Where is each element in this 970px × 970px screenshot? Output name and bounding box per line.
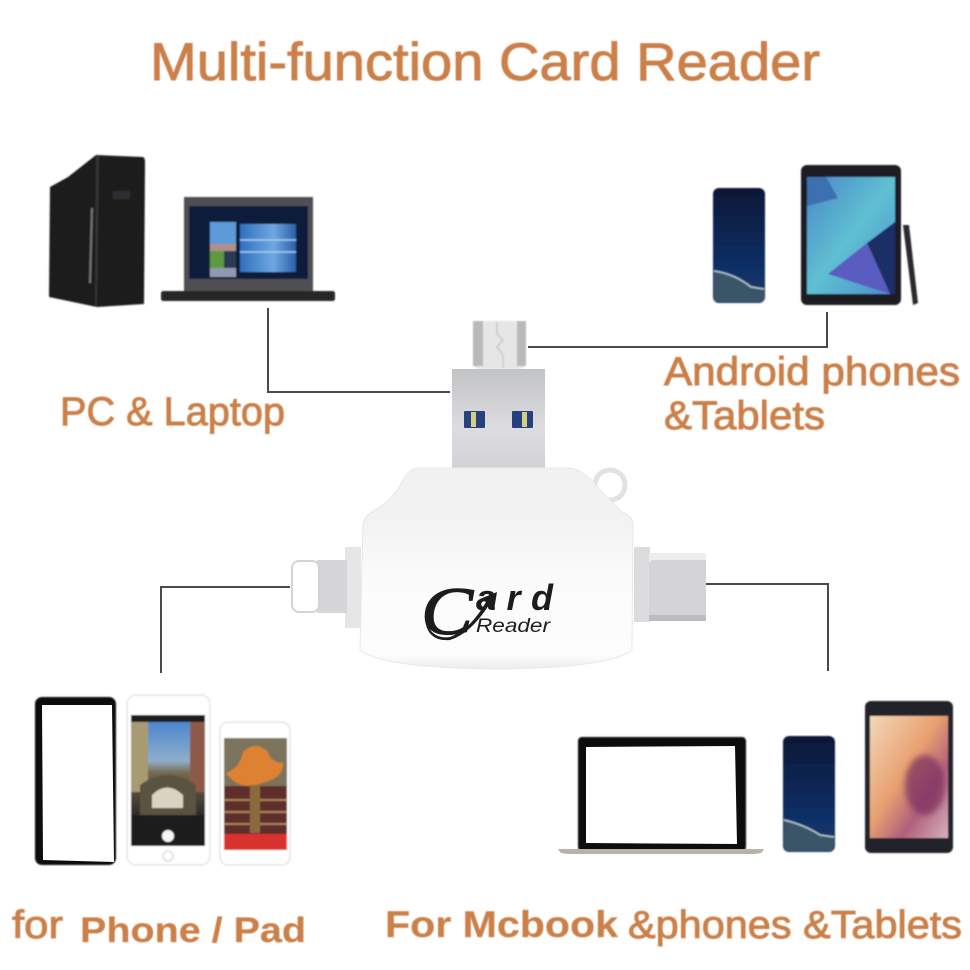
label: Android phones & Tablets: Android phones: [664, 350, 960, 394]
label: For Mcbook &phones &Tablets: [385, 904, 962, 947]
icon: iPhone with camera app: [127, 695, 210, 865]
label: for Phone / Pad: Phone / Pad: [80, 911, 306, 950]
label: Android phones & Tablets: &Tablets: [664, 394, 825, 438]
label: Android phones & Tablets: [664, 350, 960, 438]
connector: USB-A: [452, 369, 545, 468]
icon: MacBook with blank screen: [558, 737, 764, 854]
reader body: [360, 468, 633, 669]
logo: Card Reader: ard: [476, 577, 554, 618]
connector: USB-C: [706, 584, 828, 671]
icon: phone: [783, 736, 835, 852]
connector: micro USB: [473, 321, 526, 369]
icon: phone with blank screen: [35, 697, 116, 865]
label: For Mcbook &phones &Tablets: &phones &Tablets: [628, 904, 962, 947]
title: Multi-function Card Reader: [150, 33, 820, 92]
key ring: [595, 470, 625, 500]
icon: desktop tower: [49, 155, 145, 307]
logo: Card Reader: C: [421, 573, 474, 649]
icon: Android phone: [713, 188, 765, 303]
logo: Card Reader: [421, 573, 554, 649]
icon: tablet with warm screen: [865, 701, 953, 853]
icon: tablet with stylus: [801, 165, 918, 305]
label: for Phone / Pad: [12, 904, 306, 950]
icon: iPhone with hat photo: [220, 722, 290, 865]
label: PC & Laptop: PC & Laptop: [60, 390, 285, 434]
connector: PC & Laptop: [268, 308, 450, 392]
connector: Lightning: [292, 547, 361, 628]
icon: laptop with Windows screen: [161, 197, 335, 301]
label: For Mcbook &phones &Tablets: For Mcbook: [385, 904, 618, 945]
label: for Phone / Pad: for: [12, 904, 63, 947]
connector: Android: [528, 312, 827, 347]
device: multi-function card reader: [292, 321, 706, 669]
logo: Card Reader: Reader: [476, 616, 551, 637]
connector: USB-C: [634, 547, 706, 622]
connector: iPhone: [161, 587, 290, 673]
